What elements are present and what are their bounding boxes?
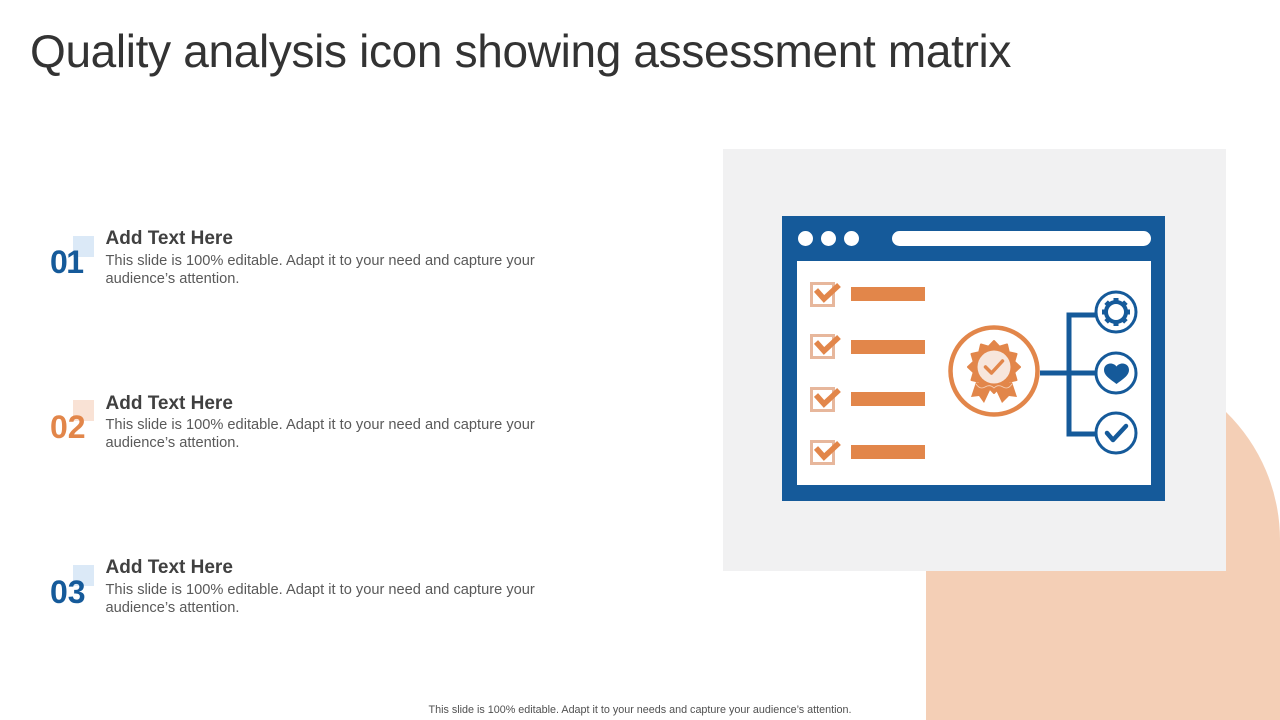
panel: illustration background <box>723 149 1226 571</box>
illustration: assessment matrix browser window <box>782 216 1165 501</box>
icon: check <box>1096 413 1136 453</box>
body text 01: audience’s attention. <box>106 271 239 287</box>
square accent 01 <box>73 236 94 257</box>
number 02: 02 <box>50 409 86 445</box>
body text 01: This slide is 100% editable. Adapt it to your need and capture your <box>106 253 535 269</box>
heading 01: Add Text Here <box>106 228 233 249</box>
square accent 02 <box>73 400 94 421</box>
number 03: 03 <box>50 574 86 610</box>
text block 01 <box>50 228 535 287</box>
body text 02: This slide is 100% editable. Adapt it to your need and capture your <box>106 417 535 433</box>
heading 02: Add Text Here <box>106 393 233 414</box>
body text 02 <box>106 417 535 451</box>
body text 02: audience’s attention. <box>106 435 239 451</box>
text block 03 <box>50 557 535 616</box>
icon: award badge <box>950 328 1038 414</box>
icon: gear <box>1096 292 1136 332</box>
square accent 03 <box>73 565 94 586</box>
browser frame <box>782 216 1165 501</box>
body text 01 <box>106 253 535 287</box>
body text 03: audience’s attention. <box>106 600 239 616</box>
icon: heart <box>1096 353 1136 393</box>
heading 03: Add Text Here <box>106 557 233 578</box>
body text 03 <box>106 582 535 616</box>
text block 02 <box>50 393 535 451</box>
checklist <box>812 284 925 464</box>
footer note: This slide is 100% editable. Adapt it to your needs and capture your audience’s attention. <box>429 704 851 716</box>
body text 03: This slide is 100% editable. Adapt it to your need and capture your <box>106 582 535 598</box>
number 01: 01 <box>50 244 83 280</box>
title: Quality analysis icon showing assessment matrix <box>30 25 1011 77</box>
decorative peach shape <box>926 412 1280 720</box>
icon: connector tree <box>1040 315 1096 434</box>
